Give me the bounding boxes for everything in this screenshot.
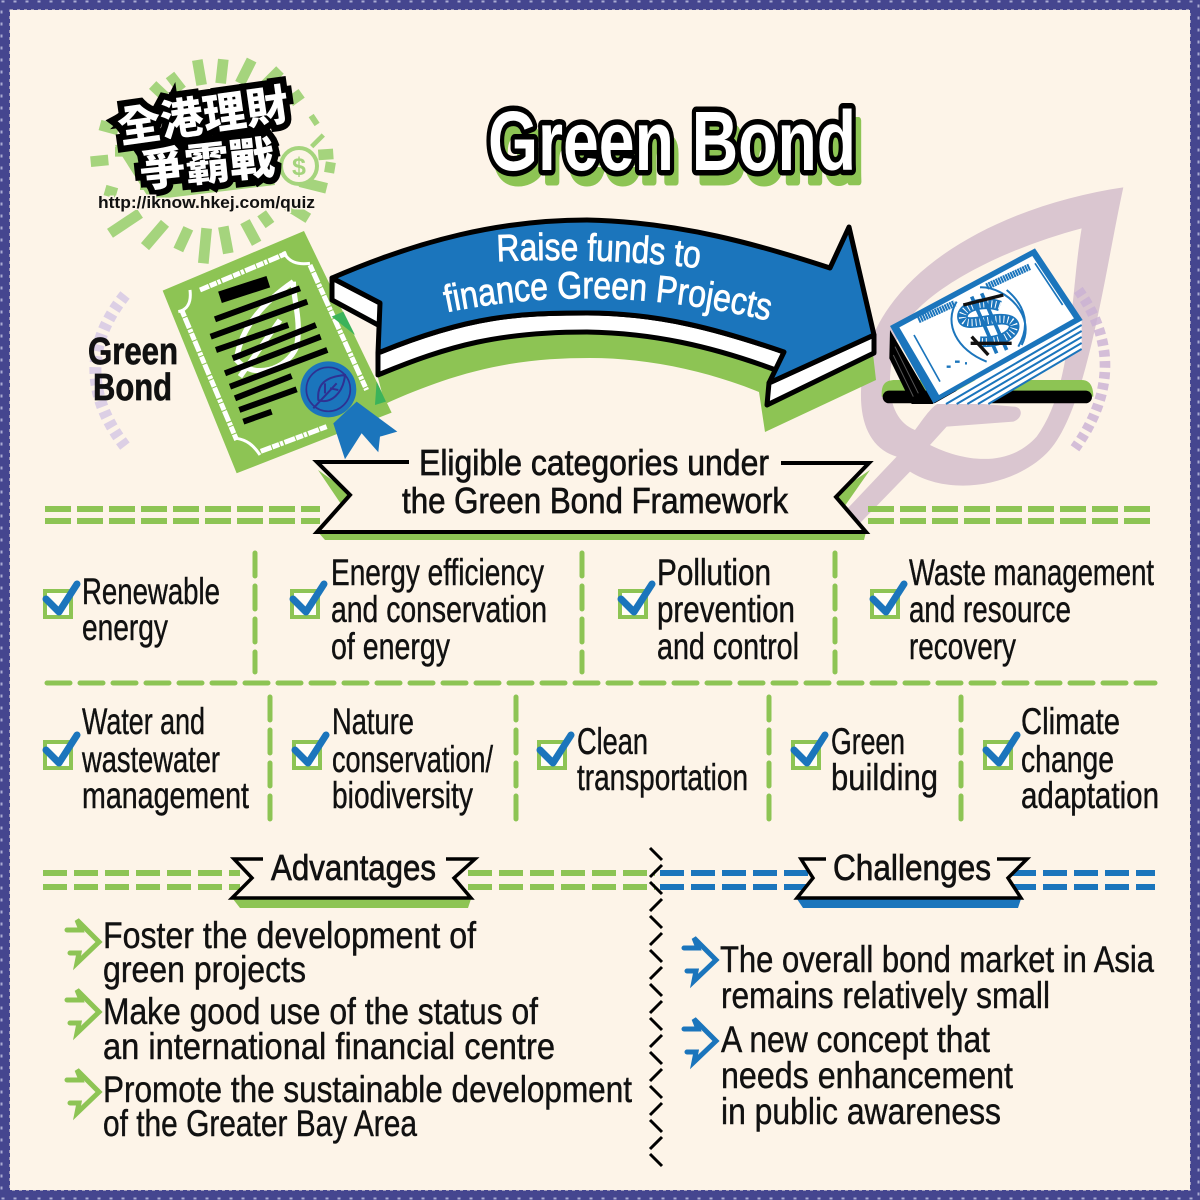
item: nature [294,701,494,816]
arrow text line 2: finance Green Projects [442,271,772,320]
challenges list [684,938,1154,1132]
eligible categories banner [316,442,870,540]
item: clean transportation: transportation [577,757,748,798]
advantage 3 [67,1069,633,1144]
logo: quiz campaign [91,59,335,263]
logo bulb dollar icon: $ [292,153,306,181]
eligible categories banner: the Green Bond Framework [402,480,789,521]
advantage 1: green projects [103,949,306,990]
item: pollution prevention: Pollution [657,552,771,593]
certificate ribbon [333,402,397,459]
arrow lower band [378,313,784,375]
dollar medallion [951,287,1026,362]
item: climate: change [1021,739,1114,780]
purple leaf background [837,187,1123,530]
advantage 1 [67,915,477,990]
item: energy efficiency [292,552,547,667]
section double dashes [43,873,1155,887]
bill stack sides [889,330,933,404]
item: climate: Climate [1021,701,1120,742]
challenge 1 [684,938,1154,1016]
challenge 2: in public awareness [721,1091,1001,1132]
categories row 2 [45,701,1159,816]
logo Chinese title line 2: 爭霸戰 [137,132,277,197]
arrow text line 1: Raise funds to [498,232,700,268]
item: nature: conservation/ [332,739,494,780]
item: clean transportation: Clean [577,721,648,762]
logo sun rays [91,59,335,263]
certificate text lines [220,282,268,297]
arrow head band [767,335,874,405]
item: water: Water and [82,701,205,742]
item: water: wastewater [81,739,220,780]
challenge 2: needs enhancement [721,1055,1014,1096]
item: renewable energy [45,571,220,648]
logo Chinese title line 1: 全港理財 [115,81,292,153]
item: energy efficiency: Energy efficiency [331,552,544,593]
item: waste management: and resource [909,589,1071,630]
arrow tail band [332,278,380,326]
label: Green Bond: Green [88,331,178,373]
arrow overlap triangles [332,312,386,405]
item: green building [793,721,938,798]
challenge 2: A new concept that [721,1019,991,1060]
item: pollution prevention: prevention [657,589,795,630]
logo bulb dollar icon [281,148,317,184]
logo url: http://iknow.hkej.com/quiz [98,194,315,212]
categories row 1 [45,552,1155,667]
item: water: management [82,775,250,816]
advantages banner: Advantages [271,847,436,888]
item: waste management [872,552,1155,667]
item: green building: Green [831,721,905,762]
item: water [45,701,250,816]
advantage 2 [67,990,555,1067]
item: pollution prevention: and control [657,626,799,667]
title: Green Bond [488,94,856,188]
purple dashes left [95,295,127,448]
item: energy efficiency: and conservation [331,589,547,630]
purple dashes right [1075,290,1105,448]
advantage 1: Foster the development of [103,915,477,956]
item: green building: building [831,757,938,798]
item: clean transportation [539,721,748,798]
green bond certificate [163,231,397,473]
item: climate [985,701,1159,816]
challenge 2 [684,1019,1014,1132]
certificate sheet [163,231,392,473]
item: nature: biodiversity [332,775,473,816]
slot [882,380,1093,397]
arrow body [332,220,874,383]
title: Green Bond [493,106,863,200]
advantage 3: Promote the sustainable development [103,1069,633,1110]
item: renewable energy: Renewable [82,571,220,612]
advantages list [67,915,633,1144]
challenge 1: remains relatively small [721,975,1050,1016]
logo green shadow [115,130,275,200]
label: Green Bond: Bond [93,367,172,409]
advantage 2: Make good use of the status of [103,991,539,1032]
item: climate: adaptation [1021,775,1159,816]
money stack in slot [882,248,1093,404]
advantages banner [232,847,475,908]
zigzag vertical divider [650,848,662,1166]
blue arrow [330,218,876,408]
challenges banner [797,847,1027,908]
label: Green Bond [88,331,178,409]
double dashed dividers [45,509,1155,521]
challenges banner: Challenges [833,847,991,888]
advantage 2: an international financial centre [103,1026,555,1067]
certificate watermark leaf [237,282,298,377]
item: renewable energy: energy [82,607,168,648]
advantage 3: of the Greater Bay Area [103,1103,417,1144]
certificate seal [300,361,356,417]
item: waste management: recovery [909,626,1016,667]
top bill [890,248,1083,403]
item: nature: Nature [332,701,414,742]
item: energy efficiency: of energy [331,626,450,667]
arrow green shadow [338,296,876,432]
item: pollution prevention [620,552,799,667]
green category grid dividers [47,553,1155,828]
banner heading: Eligible categories under [419,442,769,483]
